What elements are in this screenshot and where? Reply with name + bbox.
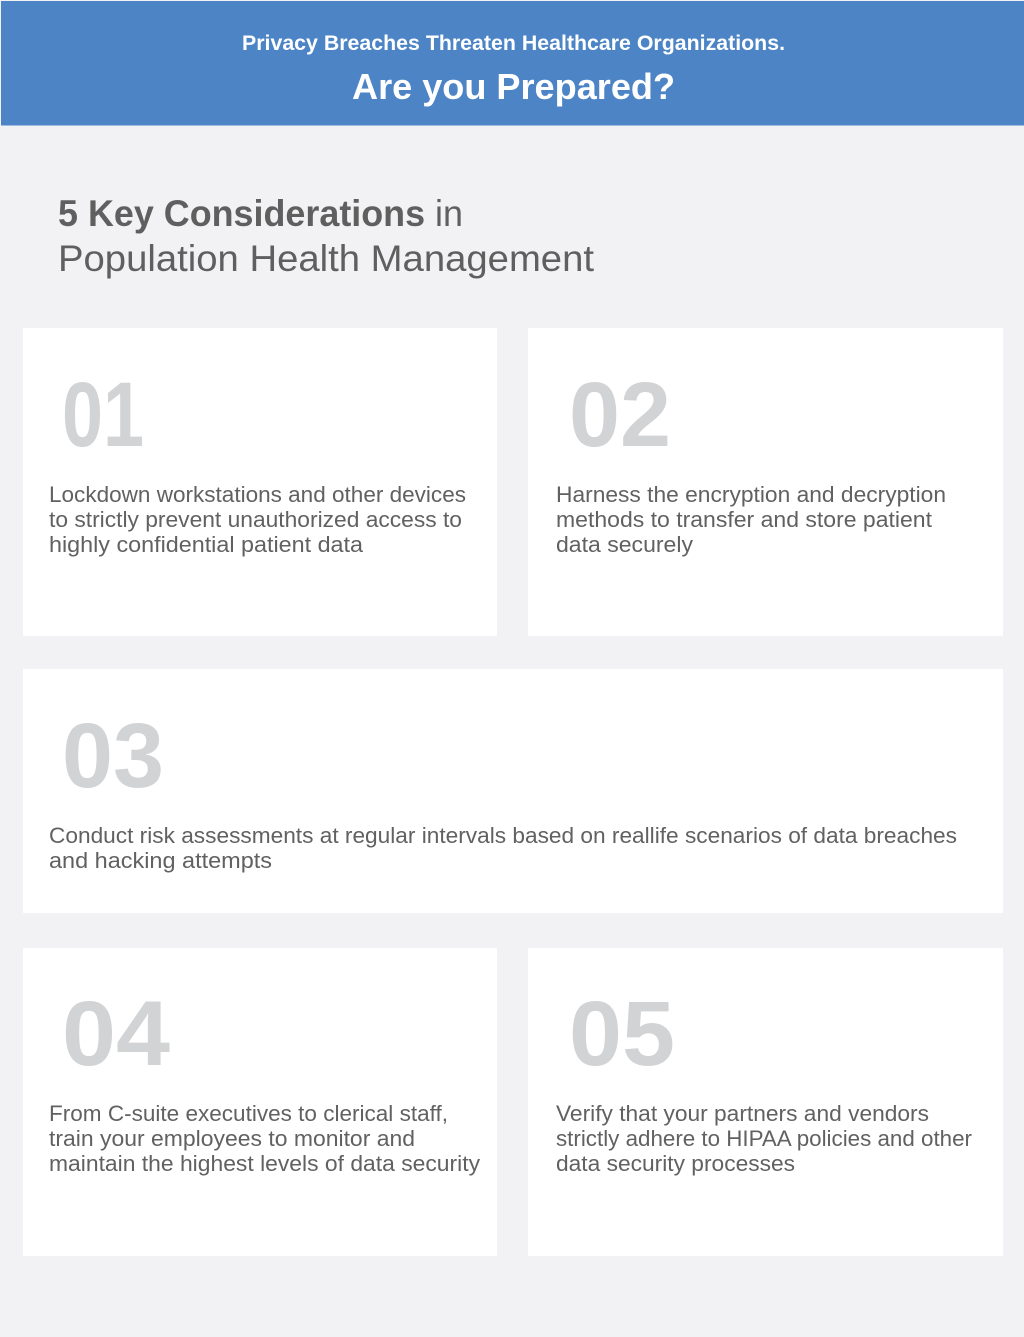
section heading: 5 Key Considerations in xyxy=(58,193,463,234)
text: consideration 01: Lockdown workstations and other devices xyxy=(49,482,466,507)
header title: Are you Prepared? xyxy=(352,66,675,107)
text: consideration 05: data security processes xyxy=(556,1151,795,1176)
panel: consideration 05 xyxy=(528,948,1003,1256)
text: consideration 02: data securely xyxy=(556,532,693,557)
panel: consideration 01 xyxy=(23,328,497,636)
text: consideration 04 xyxy=(49,1101,480,1176)
text: consideration 03 xyxy=(49,823,957,873)
number 01: 01 xyxy=(62,364,144,466)
text: consideration 05 xyxy=(556,1101,972,1176)
text: consideration 05: strictly adhere to HIPAA policies and other xyxy=(556,1126,972,1151)
number 04: 04 xyxy=(62,983,170,1085)
text: consideration 03: Conduct risk assessments at regular intervals based on reallife scenarios of data breaches xyxy=(49,823,957,848)
text: consideration 04: maintain the highest levels of data security xyxy=(49,1151,480,1176)
text: consideration 04: train your employees to monitor and xyxy=(49,1126,415,1151)
text: consideration 04: From C-suite executives to clerical staff, xyxy=(49,1101,448,1126)
number 03: 03 xyxy=(62,705,164,807)
header banner xyxy=(1,1,1024,126)
text: consideration 02: methods to transfer and store patient xyxy=(556,507,932,532)
text: consideration 03: and hacking attempts xyxy=(49,848,272,873)
panel: consideration 03 xyxy=(23,669,1003,913)
section heading: Population Health Management xyxy=(58,238,595,279)
section heading xyxy=(58,193,595,279)
text: consideration 01: to strictly prevent unauthorized access to xyxy=(49,507,462,532)
text: consideration 01: highly confidential patient data xyxy=(49,532,364,557)
number 05: 05 xyxy=(569,983,675,1085)
text: consideration 02 xyxy=(556,482,946,557)
text: consideration 01 xyxy=(49,482,466,557)
text: consideration 05: Verify that your partners and vendors xyxy=(556,1101,929,1126)
header subtitle: Privacy Breaches Threaten Healthcare Organizations. xyxy=(242,32,785,55)
text: consideration 02: Harness the encryption and decryption xyxy=(556,482,946,507)
panel: consideration 02 xyxy=(528,328,1003,636)
panel: consideration 04 xyxy=(23,948,497,1256)
number 02: 02 xyxy=(569,364,671,466)
